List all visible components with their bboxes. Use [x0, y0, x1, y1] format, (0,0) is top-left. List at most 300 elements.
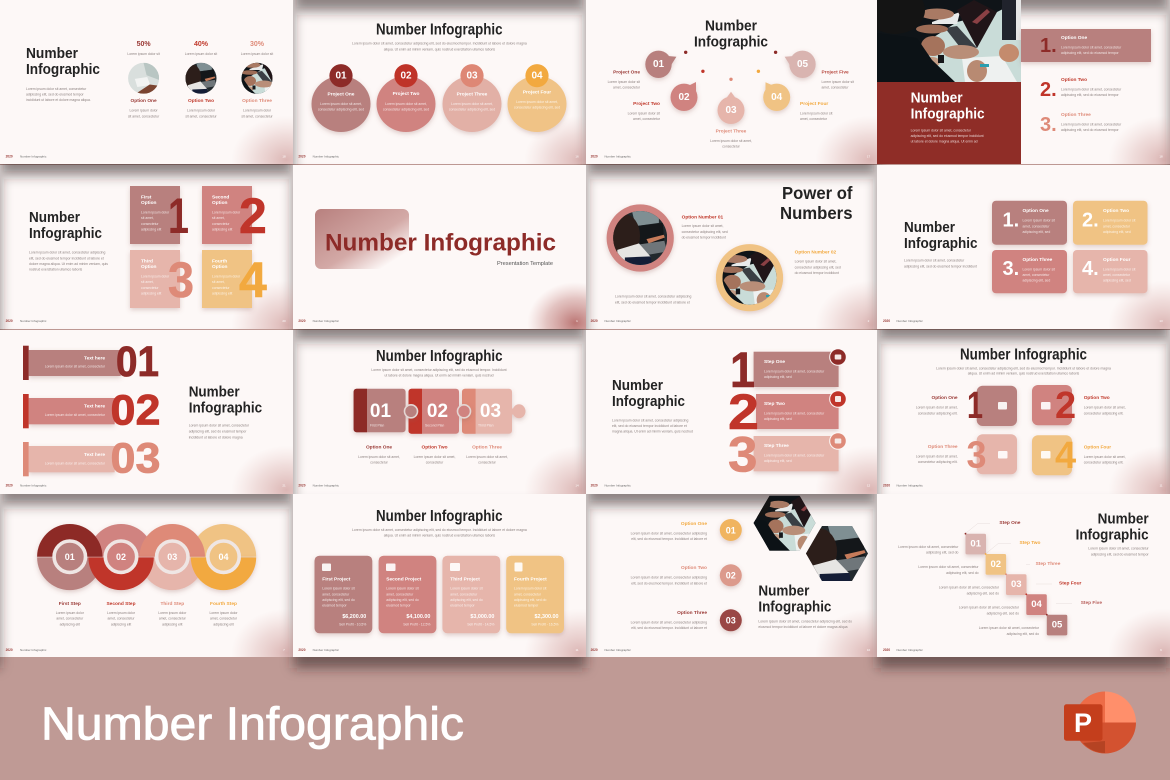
puzzle piece 3: 03 — [480, 401, 501, 422]
panel: slide 1 three percentages — [26, 41, 294, 118]
footer slide 7: Number Infographic — [604, 319, 631, 323]
project labels: amet, consectetur — [800, 117, 828, 121]
footer slide 3 — [591, 155, 870, 159]
heading — [189, 384, 262, 416]
card 2: Lorem ipsum dolor sit — [1103, 219, 1135, 223]
option one highlighted: Option One — [1061, 35, 1087, 41]
option 1: consectetur — [141, 222, 159, 226]
step three: Lorem ipsum dolor sit amet, consectetur — [764, 453, 825, 457]
bubble 03: 03 — [725, 105, 737, 116]
project two: Lorem ipsum dolor sit amet, — [385, 102, 427, 106]
project three: Project Three — [457, 92, 488, 98]
option one: 01 — [726, 525, 736, 535]
step 05: Lorem ipsum dolor sit amet, consectetur — [979, 626, 1040, 630]
option 4: Lorem ipsum dolor — [212, 274, 241, 278]
footer slide 9: 2020 — [6, 484, 13, 488]
option two: Option Two — [681, 565, 707, 571]
bubble 01 — [645, 51, 676, 78]
text block: Lorem ipsum dolor sit amet, consectetur adipiscing — [615, 295, 691, 299]
card 4 — [1073, 250, 1148, 293]
step 02: Lorem ipsum dolor sit amet, consectetur — [918, 565, 979, 569]
ring centre 02 — [105, 541, 137, 572]
photo ring two — [714, 244, 785, 316]
step two — [728, 384, 846, 440]
text block — [1088, 547, 1149, 556]
step 05 — [979, 600, 1102, 636]
card first project: eiusmod tempor — [322, 604, 347, 608]
step labels: amet, consectetur — [210, 617, 238, 621]
text block: Lorem ipsum dolor sit amet, consectetur — [904, 259, 965, 263]
project four: consectetur adipiscing elit, sed — [514, 106, 560, 110]
heading: Infographic — [694, 34, 768, 50]
option 1: 1 — [168, 188, 189, 244]
footer slide 6: 1 — [576, 319, 578, 323]
heading: Number — [904, 220, 955, 236]
panel: slide 3 five projects — [608, 19, 854, 149]
project labels: Lorem ipsum dolor sit — [628, 111, 660, 115]
option labels — [916, 395, 1126, 465]
step 03: Lorem ipsum dolor sit amet, consectetur — [939, 586, 1000, 590]
option labels: consectetur adipiscing elit. — [1084, 461, 1124, 465]
ribbon 02: Lorem ipsum dolor sit amet, consectetur — [45, 413, 106, 417]
option two: elit, sed do eiusmod tempor. Incididunt ut labore et — [631, 581, 707, 585]
project labels: Project One — [613, 70, 640, 76]
step 03: Step Three — [1036, 561, 1061, 567]
option one highlighted — [1021, 29, 1151, 62]
step labels: amet, consectetur — [56, 617, 84, 621]
option three: Option Three — [242, 98, 272, 104]
footer slide 10 — [298, 484, 579, 488]
text block: aliqua. Ut enim ad minim veniam, quis nostrud exercitation ullamco laboris — [384, 534, 495, 538]
footer slide 13: 2020 — [6, 648, 13, 652]
heading: Number Infographic — [960, 346, 1087, 363]
heading: Number — [612, 378, 663, 394]
card second project: amet, consectetur — [386, 592, 414, 596]
text block — [936, 366, 1111, 376]
option labels: Option Four — [1084, 444, 1111, 450]
text block: Lorem ipsum dolor sit amet, consectetur adipiscing elit, sed do eiusmod tempor. Incididunt ut labore et dolore magna — [352, 42, 527, 46]
card 3: adipiscing elit, sed — [1022, 279, 1050, 283]
step 02 — [918, 540, 1041, 575]
text block: elit, sed do eiusmod tempor incididunt ut labore et — [615, 300, 690, 304]
option 1: Lorem ipsum dolor — [141, 210, 170, 214]
option one: Option One — [131, 98, 157, 104]
text block: elit, sed do eiusmod tempor incididunt ut labore et — [612, 424, 687, 428]
ribbon 03 — [23, 434, 160, 482]
hexagon photo one — [754, 496, 816, 551]
card 3: 3. — [1002, 258, 1019, 280]
card fourth project: Lorem ipsum dolor sit — [514, 587, 546, 591]
step labels: First Step — [59, 601, 81, 607]
card first project: adipiscing elit, sed do — [322, 598, 355, 602]
text block: ut labore et dolore magna aliqua. Ut enim ad minim veniam, quis nostrud — [384, 374, 494, 378]
option one: sit amet, consectetur — [128, 114, 160, 118]
step labels: amet, consectetur — [159, 617, 187, 621]
bubble 05: 05 — [797, 59, 808, 70]
option two: 02 — [726, 571, 736, 581]
footer slide 8: 13 — [1159, 319, 1163, 323]
card first project: Lorem ipsum dolor sit — [322, 587, 355, 591]
step labels: Lorem ipsum dolor — [56, 611, 85, 615]
card second project: Sell Profit - 12,5% — [403, 622, 430, 626]
step 04: 04 — [1031, 599, 1042, 610]
panel: slide 16 staircase — [898, 511, 1149, 636]
text block: Lorem ipsum dolor sit amet, consectetur adipiscing elit, sed do — [758, 619, 852, 623]
option two: Lorem ipsum dolor sit amet, consectetur adipiscing — [631, 576, 707, 580]
bubble 04: 04 — [771, 92, 783, 103]
step two: Step Two — [764, 401, 785, 407]
footer slide 14: 11 — [575, 648, 579, 652]
footer slide 11 — [591, 484, 870, 488]
card second project: Lorem ipsum dolor sit — [386, 587, 419, 591]
footer slide 12: 11 — [1159, 484, 1163, 488]
option three — [241, 41, 274, 118]
ring centre 02: 02 — [116, 552, 126, 562]
step two: Lorem ipsum dolor sit amet, consectetur — [764, 411, 825, 415]
option 4: Fourth — [212, 258, 227, 264]
step 03: 03 — [1011, 579, 1022, 590]
text block: incididunt ut labore et dolore magna — [189, 435, 243, 439]
option three — [631, 609, 742, 631]
project three — [442, 64, 502, 132]
project labels: Lorem ipsum dolor sit — [822, 80, 854, 84]
option three: 3. — [1040, 114, 1057, 136]
heading — [1076, 511, 1149, 543]
puzzle piece 1: 01 — [370, 401, 391, 422]
footer slide 13: 7 — [283, 648, 285, 652]
card 4: Option Four — [1103, 257, 1131, 263]
option labels — [358, 444, 508, 465]
option two: 40% — [194, 41, 209, 48]
heading: Number Infographic — [376, 348, 503, 365]
text block — [758, 619, 852, 629]
panel: slide 13 linked rings — [37, 524, 256, 626]
text block: magna aliqua. Ut enim ad minim veniam, quis nostrud — [612, 430, 693, 434]
text block: incididunt ut labore et dolore magna aliqua. — [26, 98, 91, 102]
footer slide 7: 2020 — [591, 319, 598, 323]
card second project — [379, 556, 436, 633]
step three: 3 — [728, 426, 758, 482]
card third project: Lorem ipsum dolor sit — [450, 587, 483, 591]
card 4: adipiscing elit, sed — [1103, 279, 1131, 283]
heading: Infographic — [1076, 527, 1149, 543]
option 2: sit amet, — [212, 216, 225, 220]
step labels: Lorem ipsum dolor — [107, 611, 136, 615]
panel: slide 11 three steps — [612, 342, 846, 482]
footer slide 4: 18 — [1159, 155, 1163, 159]
option 3: Lorem ipsum dolor — [141, 274, 170, 278]
step 03: adipiscing elit, sed do — [967, 592, 999, 596]
option number 02: consectetur adipiscing elit, sed — [795, 265, 841, 269]
card third project: eiusmod tempor — [450, 604, 475, 608]
project two — [376, 64, 436, 132]
heading — [26, 46, 100, 78]
card fourth project: adipiscing elit, sed do — [514, 598, 547, 602]
ring centre 03 — [157, 541, 188, 572]
card second project: Second Project — [386, 576, 422, 582]
option 4: Option — [212, 264, 228, 270]
card fourth project: Fourth Project — [514, 576, 547, 582]
card 1: adipiscing elit, sed — [1022, 230, 1050, 234]
text block: adipiscing elit, sed do eiusmod tempor — [1091, 552, 1149, 556]
step 01: Lorem ipsum dolor sit amet, consectetur — [898, 545, 959, 549]
option 1: adipiscing elit — [141, 228, 161, 232]
card second project: eiusmod tempor — [386, 604, 411, 608]
option labels: consectetur — [370, 461, 389, 465]
project labels: Lorem ipsum dolor sit — [800, 111, 832, 115]
project labels: Lorem ipsum dolor sit amet, — [710, 139, 752, 143]
option two: Lorem ipsum dolor — [187, 109, 216, 113]
heading: Number — [758, 584, 810, 600]
footer slide 11: 12 — [867, 484, 870, 488]
card fourth project: Sell Profit - 16,5% — [531, 622, 558, 626]
option 3: Option — [141, 264, 157, 270]
card fourth project: eiusmod tempor — [514, 604, 539, 608]
text block: nostrud exercitation ullamco laboris — [29, 268, 82, 272]
heading: Numbers — [780, 203, 853, 223]
ring centre 04: 04 — [218, 552, 229, 562]
step 01: 01 — [970, 538, 982, 550]
ribbon 02: Text here — [84, 404, 105, 410]
text block: Lorem ipsum dolor sit amet, consectetur adipiscing — [612, 418, 688, 422]
card first project: First Project — [322, 576, 351, 582]
step labels: adipiscing elit — [213, 622, 234, 626]
footer slide 9: 21 — [282, 484, 286, 488]
card second project: adipiscing elit, sed do — [386, 598, 419, 602]
footer slide 16: 2020 — [883, 648, 890, 652]
footer slide 6: Number Infographic — [313, 319, 339, 323]
text block: Lorem ipsum dolor sit amet, consectetur adipiscing elit, sed do eiusmod tempor. Incididunt ut labore et dolore magna — [936, 366, 1111, 370]
panel: slide 15 hexagon photos — [631, 485, 868, 631]
panel: slide 9 ribbons — [23, 338, 262, 482]
ribbon 02 — [23, 386, 160, 434]
card third project: Sell Profit - 14,5% — [467, 622, 494, 626]
step two: adipiscing elit, sed — [764, 417, 792, 421]
text block — [352, 42, 527, 51]
text block: adipiscing elit, sed do eiusmod tempor — [189, 429, 247, 433]
heading: Power of — [782, 183, 853, 203]
footer slide 5 — [6, 319, 286, 323]
footer slide 3: 2020 — [591, 155, 598, 159]
ring bottoms — [37, 557, 256, 590]
footer slide 13 — [6, 648, 285, 652]
footer slide 5: Number Infographic — [20, 319, 47, 323]
square 4: 4 — [1055, 435, 1076, 477]
footer slide 15: 10 — [867, 648, 870, 652]
panel: slide 4 photo and list — [865, 0, 1151, 164]
red title panel: adipiscing elit, sed do eiusmod tempor incididunt — [911, 134, 984, 138]
footer slide 16: Number Infographic — [896, 648, 923, 652]
text block: Lorem ipsum dolor sit amet, consectetur adipiscing elit, sed do eiusmod tempor. Incididunt ut labore et dolore magna — [352, 528, 527, 532]
heading: Infographic — [904, 236, 978, 252]
option number 01 — [682, 214, 728, 240]
ribbon 01: 01 — [116, 338, 159, 386]
option two: adipiscing elit, sed do eiusmod tempor — [1061, 93, 1120, 97]
heading: Number — [1098, 511, 1149, 527]
step 01 — [898, 520, 1021, 555]
step 04: Step Four — [1059, 580, 1082, 586]
card 2: Option Two — [1103, 208, 1129, 214]
option two — [631, 564, 742, 586]
card 3: Option Three — [1022, 257, 1053, 263]
project three: consectetur adipiscing elit, sed — [449, 108, 495, 112]
ribbon 03: Text here — [84, 452, 105, 458]
connector lines — [966, 523, 1072, 604]
ring centre 01: 01 — [65, 552, 75, 562]
option labels: Lorem ipsum dolor sit amet, — [466, 455, 508, 459]
option three: Option Three — [1061, 112, 1091, 118]
photo ring one — [607, 204, 674, 272]
option labels: Lorem ipsum dolor sit amet, — [1084, 406, 1126, 410]
project labels: Lorem ipsum dolor sit — [608, 80, 640, 84]
ribbon 02: 02 — [110, 386, 160, 434]
text block — [615, 295, 691, 304]
card first project: $6,200.00 — [342, 614, 366, 620]
option labels: Lorem ipsum dolor sit amet, — [1084, 455, 1126, 459]
card 3: Lorem ipsum dolor sit — [1022, 267, 1055, 271]
option one — [127, 41, 160, 118]
option two: sit amet, consectetur — [185, 114, 218, 118]
project four: Project Four — [523, 90, 551, 96]
option 2 — [202, 186, 267, 244]
card third project: amet, consectetur — [450, 592, 478, 596]
option 1: First — [141, 194, 152, 200]
footer slide 2 — [298, 155, 579, 159]
text block: adipiscing elit, sed do eiusmod tempor incididunt — [904, 264, 977, 268]
footer slide 8: 2020 — [883, 319, 890, 323]
card fourth project: $2,300.00 — [535, 614, 558, 620]
footer slide 14 — [298, 648, 579, 652]
card fourth project: amet, consectetur — [514, 592, 542, 596]
heading — [758, 584, 831, 616]
puzzle piece 3: Third Plan — [478, 423, 494, 427]
footer slide 15: 2020 — [591, 648, 598, 652]
project labels: Project Four — [800, 101, 828, 107]
bubble 05 — [785, 51, 816, 78]
card second project: $4,100.00 — [406, 614, 430, 620]
project four: 04 — [531, 70, 543, 82]
footer slide 7 — [591, 319, 870, 323]
footer slide 12: Number Infographic — [896, 484, 923, 488]
step 02: 02 — [991, 559, 1001, 570]
step 05: adipiscing elit, sed do — [1007, 632, 1039, 636]
photo — [865, 0, 1021, 82]
option number 02: do eiusmod tempor incididunt — [795, 271, 839, 275]
option number 01: Option Number 01 — [682, 214, 724, 220]
option labels: consectetur — [426, 461, 444, 465]
heading: Number — [29, 210, 80, 226]
step labels: Lorem ipsum dolor — [209, 611, 238, 615]
option labels: Option Three — [928, 444, 958, 450]
footer slide 1 — [6, 155, 286, 159]
text block: aliqua. Ut enim ad minim veniam, quis nostrud exercitation ullamco laboris — [968, 372, 1079, 376]
project three: Lorem ipsum dolor sit amet, — [451, 102, 493, 106]
option 4: adipiscing elit — [212, 292, 232, 296]
option 4: consectetur — [212, 286, 230, 290]
main title: Number Infographic — [325, 230, 556, 257]
option labels: Option One — [366, 444, 392, 450]
heading — [694, 19, 768, 50]
ribbon 01: Lorem ipsum dolor sit amet, consectetur — [45, 364, 106, 368]
footer slide 15: Number Infographic — [604, 648, 631, 652]
heading: Number Infographic — [376, 508, 503, 525]
option 3 — [130, 250, 194, 308]
step 04: Lorem ipsum dolor sit amet, consectetur — [959, 606, 1020, 610]
step labels: adipiscing elit — [60, 622, 80, 626]
project two: consectetur adipiscing elit, sed — [383, 108, 429, 112]
footer slide 16 — [883, 648, 1162, 652]
option three: 30% — [250, 41, 265, 48]
bubble 02 — [670, 82, 698, 111]
puzzle piece 1: First Plan — [370, 423, 384, 427]
footer slide 10: 14 — [575, 484, 579, 488]
project four — [508, 64, 566, 132]
card 4: Lorem ipsum dolor sit — [1103, 267, 1135, 271]
panel: slide 12 icon squares — [916, 346, 1126, 477]
option two: 2. — [1040, 79, 1057, 101]
step 05: Step Five — [1081, 600, 1102, 606]
text block: Lorem ipsum dolor sit amet, consectetur adipiscing — [29, 251, 105, 255]
card first project: amet, consectetur — [322, 592, 350, 596]
text block — [371, 368, 507, 378]
footer slide 1: Number Infographic — [20, 155, 47, 159]
footer slide 8: Number Infographic — [896, 319, 923, 323]
panel: slide 6 cover — [315, 209, 556, 269]
card 2: 2. — [1082, 210, 1099, 232]
option labels: Option Two — [421, 444, 448, 450]
option three: Lorem ipsum dolor sit amet, consectetur — [1061, 122, 1122, 126]
option 3: Third — [141, 258, 153, 264]
bottom title: Number Infographic — [41, 697, 464, 749]
ring centre 04 — [208, 541, 239, 572]
project two: Project Two — [393, 91, 419, 97]
footer slide 10: Number Infographic — [313, 484, 339, 488]
step 03 — [939, 561, 1061, 596]
heading: Infographic — [612, 394, 685, 410]
option two: Lorem ipsum dolor sit — [185, 52, 217, 56]
footer slide 13: Number Infographic — [20, 648, 47, 652]
square 1 — [967, 385, 1017, 427]
step labels: amet, consectetur — [108, 617, 135, 621]
red title panel: Lorem ipsum dolor sit amet, consectetur — [911, 128, 972, 132]
square 4 — [1032, 435, 1076, 477]
heading: Infographic — [29, 226, 102, 242]
card third project: adipiscing elit, sed do — [450, 598, 483, 602]
step one: 1 — [730, 342, 755, 398]
card first project: Sell Profit - 10,5% — [339, 622, 366, 626]
heading — [612, 378, 685, 410]
option one — [631, 519, 742, 541]
option one highlighted: 1. — [1040, 35, 1057, 57]
red title panel — [877, 82, 1021, 164]
option 4 — [202, 250, 267, 308]
footer slide 6 — [298, 319, 578, 323]
step 01: Step One — [999, 520, 1021, 526]
footer slide 9 — [6, 484, 286, 488]
project labels: Project Three — [716, 128, 747, 134]
option three: elit, sed do eiusmod tempor. Incididunt ut labore et — [631, 626, 707, 630]
step two: 2 — [728, 384, 759, 440]
option 4: 4 — [239, 252, 267, 308]
card first project — [314, 556, 372, 633]
option 2: 2 — [239, 188, 267, 244]
option labels: Option Two — [1084, 395, 1110, 401]
heading: Number — [26, 46, 78, 62]
heading: Number — [705, 19, 757, 35]
ribbon 01: Text here — [84, 356, 105, 362]
red title panel: Infographic — [911, 107, 985, 123]
option labels: Lorem ipsum dolor sit amet, — [916, 454, 958, 458]
